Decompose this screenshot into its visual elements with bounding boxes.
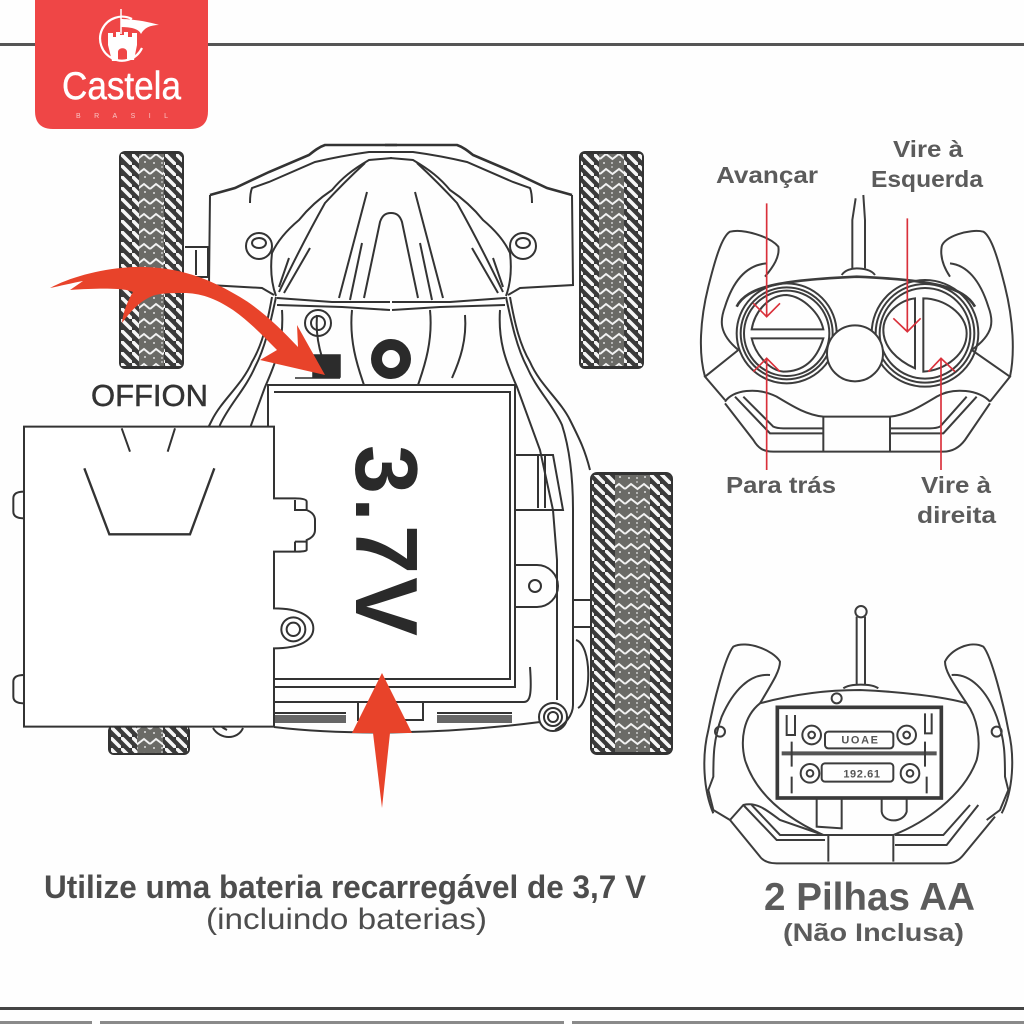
battery cover — [13, 427, 315, 727]
red up arrow — [352, 673, 412, 808]
bumper shading — [274, 715, 512, 723]
tire: bottom left — [108, 725, 190, 755]
batteries caption: 2 Pilhas AA — [764, 876, 975, 919]
remote: batteries: UOAE — [841, 734, 878, 746]
OFF ON label: OFFION — [91, 378, 208, 413]
logo wordmark: Castela — [62, 65, 181, 108]
label: Para trás: Para trás — [726, 472, 836, 498]
logo badge — [35, 0, 208, 129]
tire: top right — [579, 151, 644, 369]
rechargeable battery caption — [44, 869, 647, 936]
remote: controls — [701, 136, 1013, 528]
car body right half — [385, 145, 590, 730]
battery lower body — [213, 455, 590, 737]
batteries caption: (Não Inclusa) — [783, 919, 964, 947]
label: Vire à Esquerda — [871, 136, 983, 192]
batteries caption — [764, 876, 975, 947]
voltage label: 3.7V — [337, 445, 436, 636]
logo subtitle: BRASIL — [76, 113, 168, 120]
top divider — [0, 43, 1024, 46]
castle icon — [100, 9, 159, 61]
left axle connector — [185, 247, 208, 277]
red pointers — [753, 203, 955, 470]
remote outline — [701, 195, 1013, 452]
bottom divider — [0, 1007, 1024, 1010]
tire: bottom right — [590, 472, 673, 755]
rechargeable battery caption: Utilize uma bateria recarregável de 3,7 V — [44, 869, 647, 905]
label: Vire à direita: Vire à — [921, 472, 991, 498]
battery compartment — [268, 385, 515, 687]
label: Vire à direita — [917, 472, 996, 528]
car drawing — [13, 145, 673, 755]
rechargeable battery caption: (incluindo baterias) — [206, 903, 487, 936]
label: Vire à direita: direita — [917, 502, 996, 528]
power switch — [295, 355, 340, 378]
dial switch ring — [376, 344, 406, 374]
bottom strip — [0, 1021, 1024, 1024]
label: Avançar: Avançar — [716, 162, 818, 188]
tire: top left — [119, 151, 184, 369]
remote: batteries — [704, 606, 1012, 863]
car body left half — [192, 145, 397, 730]
red curved arrow — [50, 267, 325, 375]
label: Vire à Esquerda: Vire à — [893, 136, 963, 162]
remote: batteries: 192.61 — [843, 768, 880, 780]
screw near switch — [305, 310, 331, 336]
label: Vire à Esquerda: Esquerda — [871, 166, 983, 192]
